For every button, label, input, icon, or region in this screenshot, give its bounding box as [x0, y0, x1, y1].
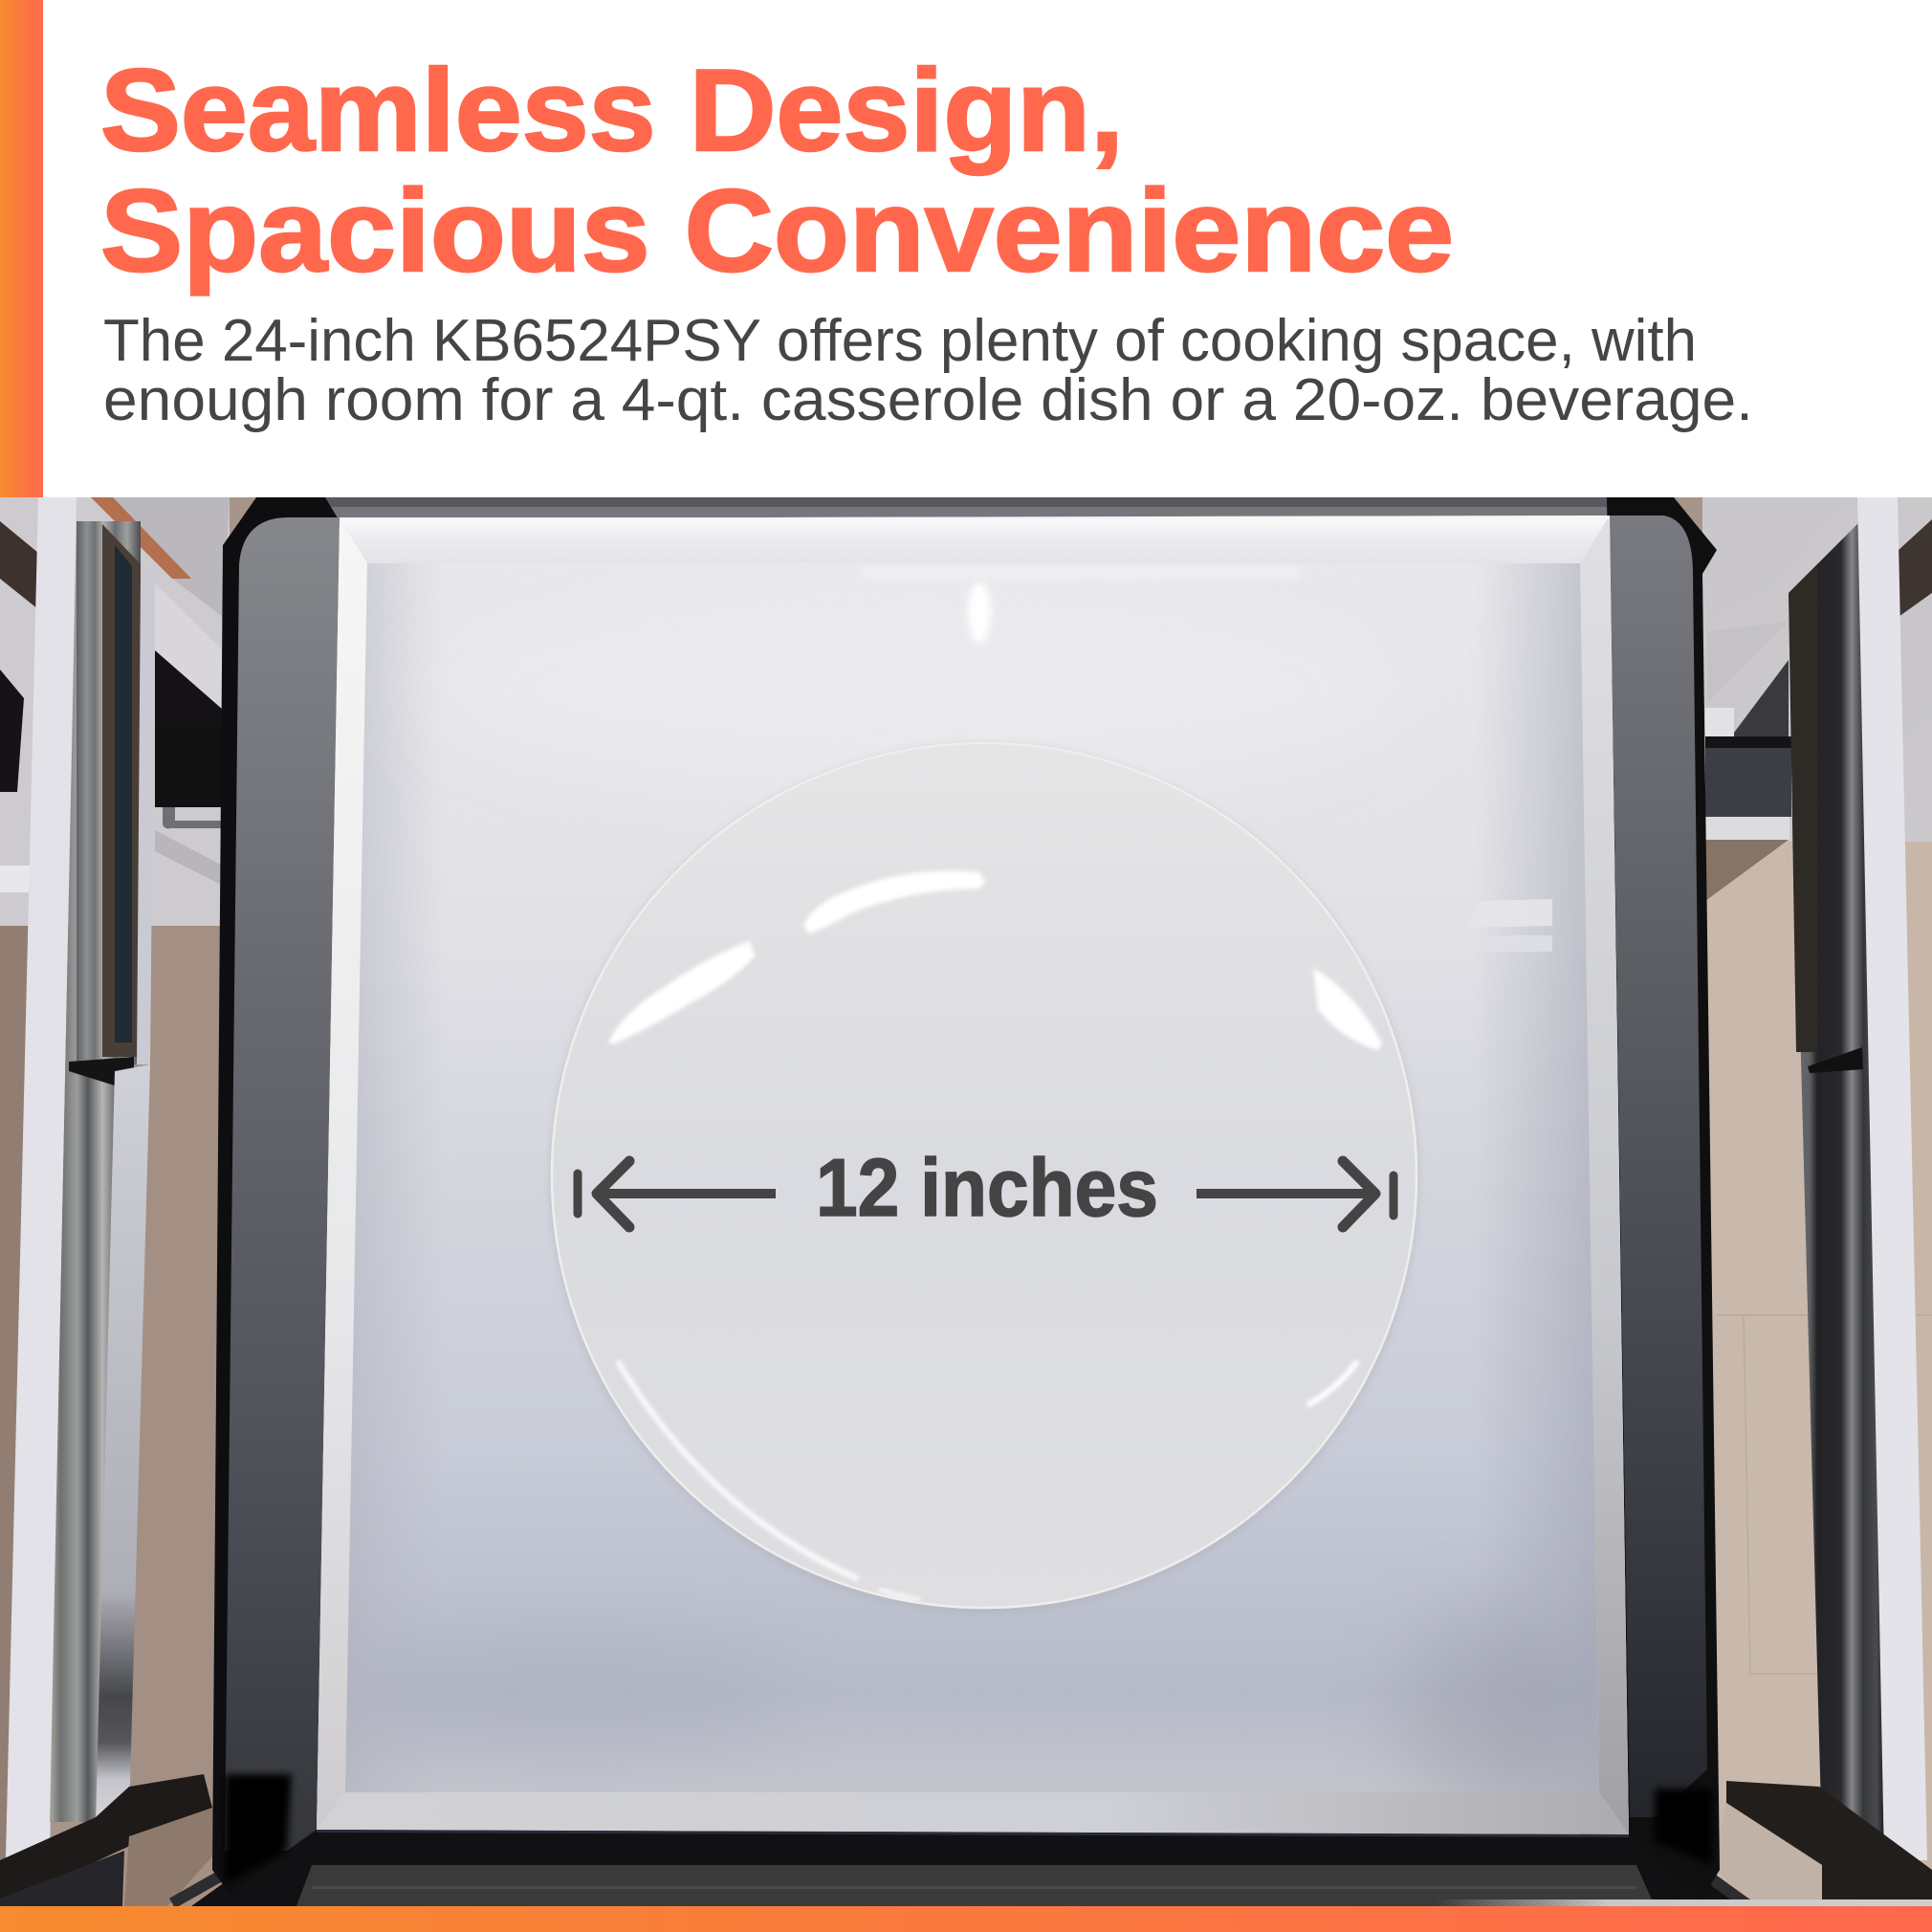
- backdrop: wood floor and cabinet surroundings: [0, 497, 1932, 1906]
- description text: [103, 308, 1753, 433]
- left drawer slide: [6, 497, 155, 1857]
- drawer frame: right side panel: [1607, 497, 1720, 1899]
- title: Spacious Convenience: [100, 165, 1454, 296]
- white drawer liner: [317, 516, 1629, 1837]
- drawer frame: left side panel: [212, 497, 340, 1894]
- drawer frame: back wall and bottom: [172, 497, 1760, 1906]
- left dimension arrow: [578, 1161, 776, 1227]
- right drawer slide: [1789, 497, 1927, 1860]
- description text: enough room for a 4-qt. casserole dish or a 20-oz. beverage.: [103, 367, 1753, 433]
- title: Seamless Design,: [100, 45, 1124, 175]
- plate: 12-inch white dish: [549, 742, 1419, 1614]
- bottom edge highlight line: [1435, 1899, 1932, 1906]
- left cabinet detail: [0, 497, 230, 892]
- wood plank seams: [1717, 1315, 1932, 1674]
- accent stripe: bottom gradient bar: [0, 1906, 1932, 1932]
- right dimension arrow: [1197, 1161, 1394, 1227]
- measurement label: 12 inches: [816, 1143, 1158, 1234]
- description text: The 24-inch KB6524PSY offers plenty of cooking space, with: [103, 308, 1697, 374]
- title: [100, 45, 1454, 296]
- plate highlights: [608, 871, 1382, 1050]
- measurement: 12 inches: [574, 1155, 1398, 1232]
- accent stripe: left orange bar: [0, 0, 43, 497]
- photo: open drawer viewed from above: [0, 497, 1932, 1906]
- right cabinet detail: [1702, 497, 1932, 901]
- bottom shelf supports: [0, 1774, 1932, 1906]
